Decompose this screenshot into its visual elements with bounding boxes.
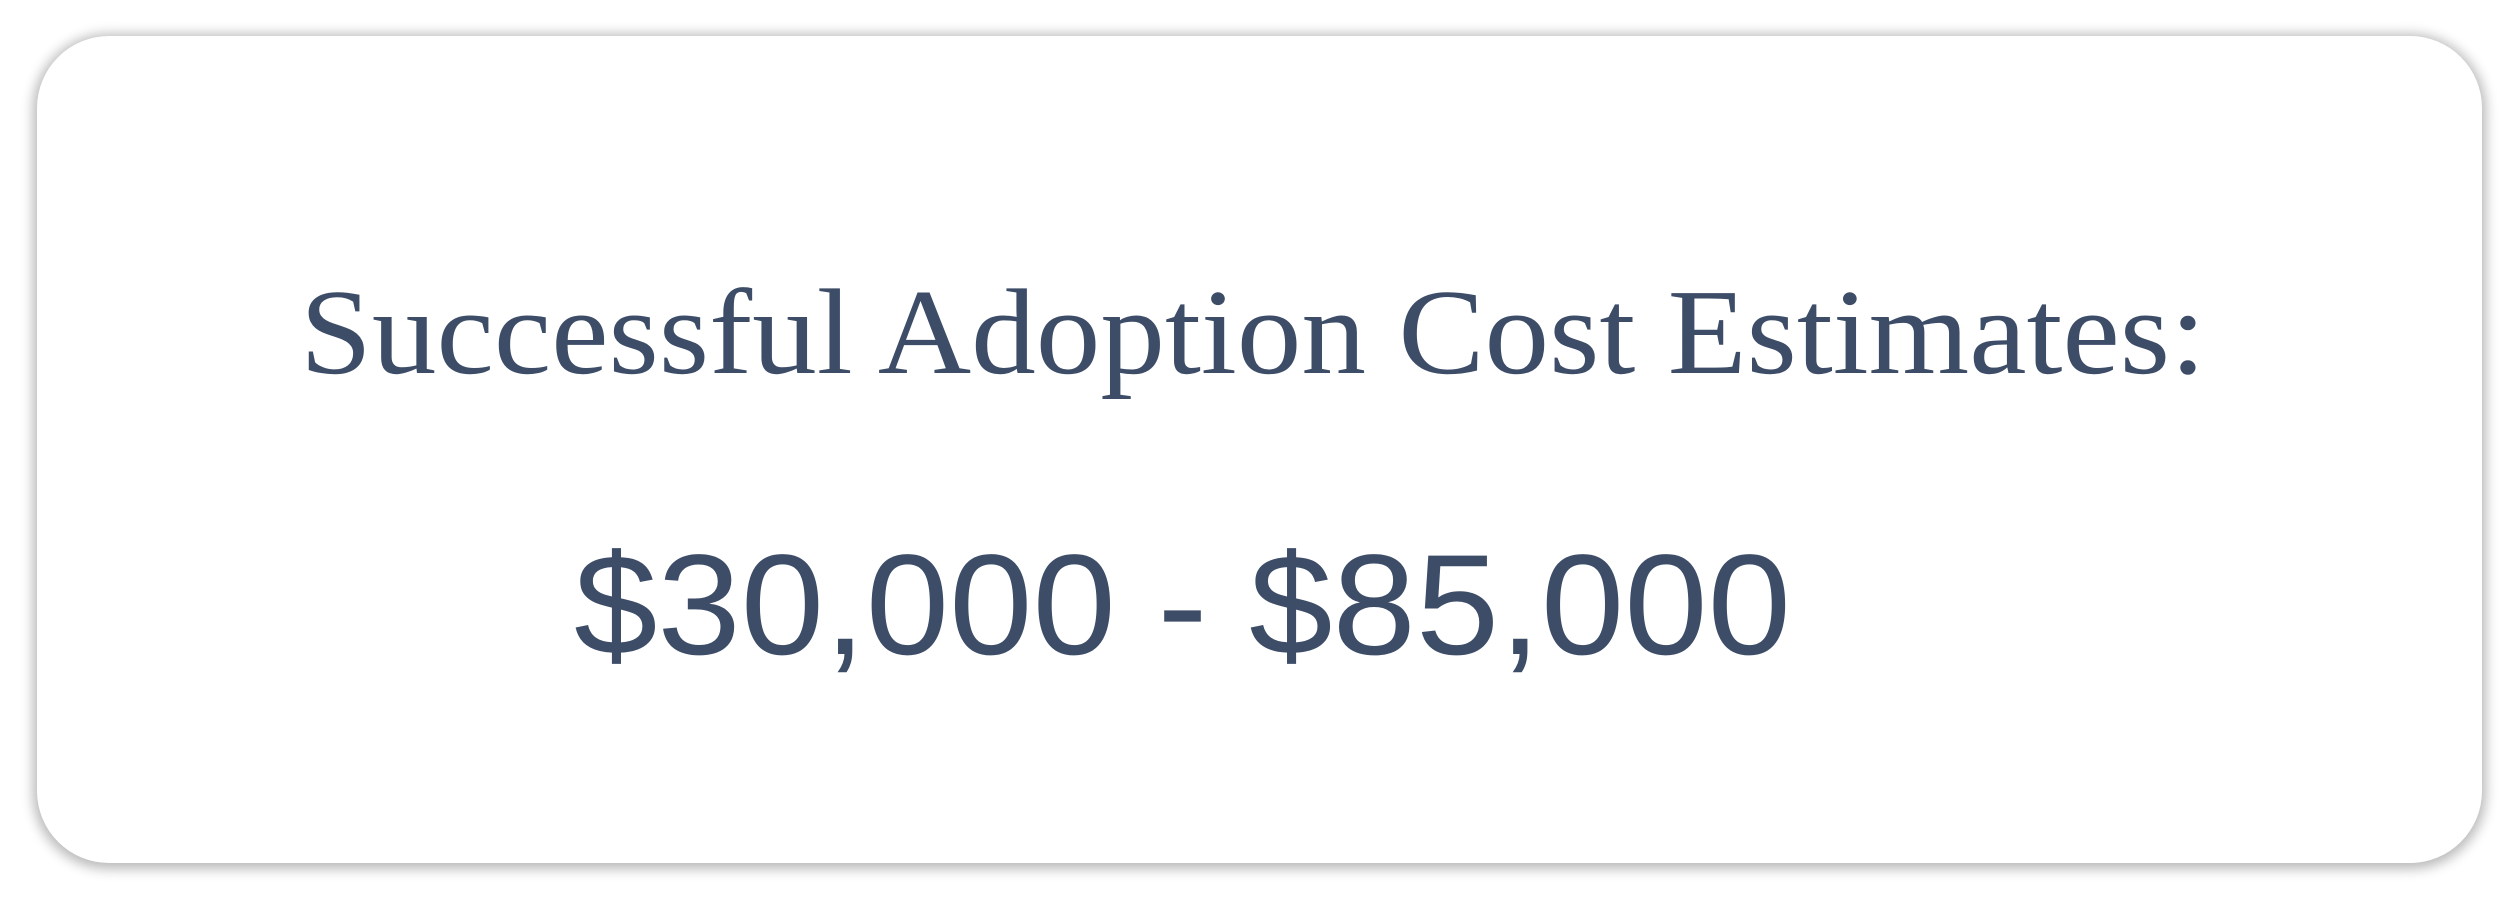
title: Successful Adoption Cost Estimates: bbox=[300, 265, 2206, 400]
cost range figure: $30,000 - $85,000 bbox=[574, 526, 1791, 685]
